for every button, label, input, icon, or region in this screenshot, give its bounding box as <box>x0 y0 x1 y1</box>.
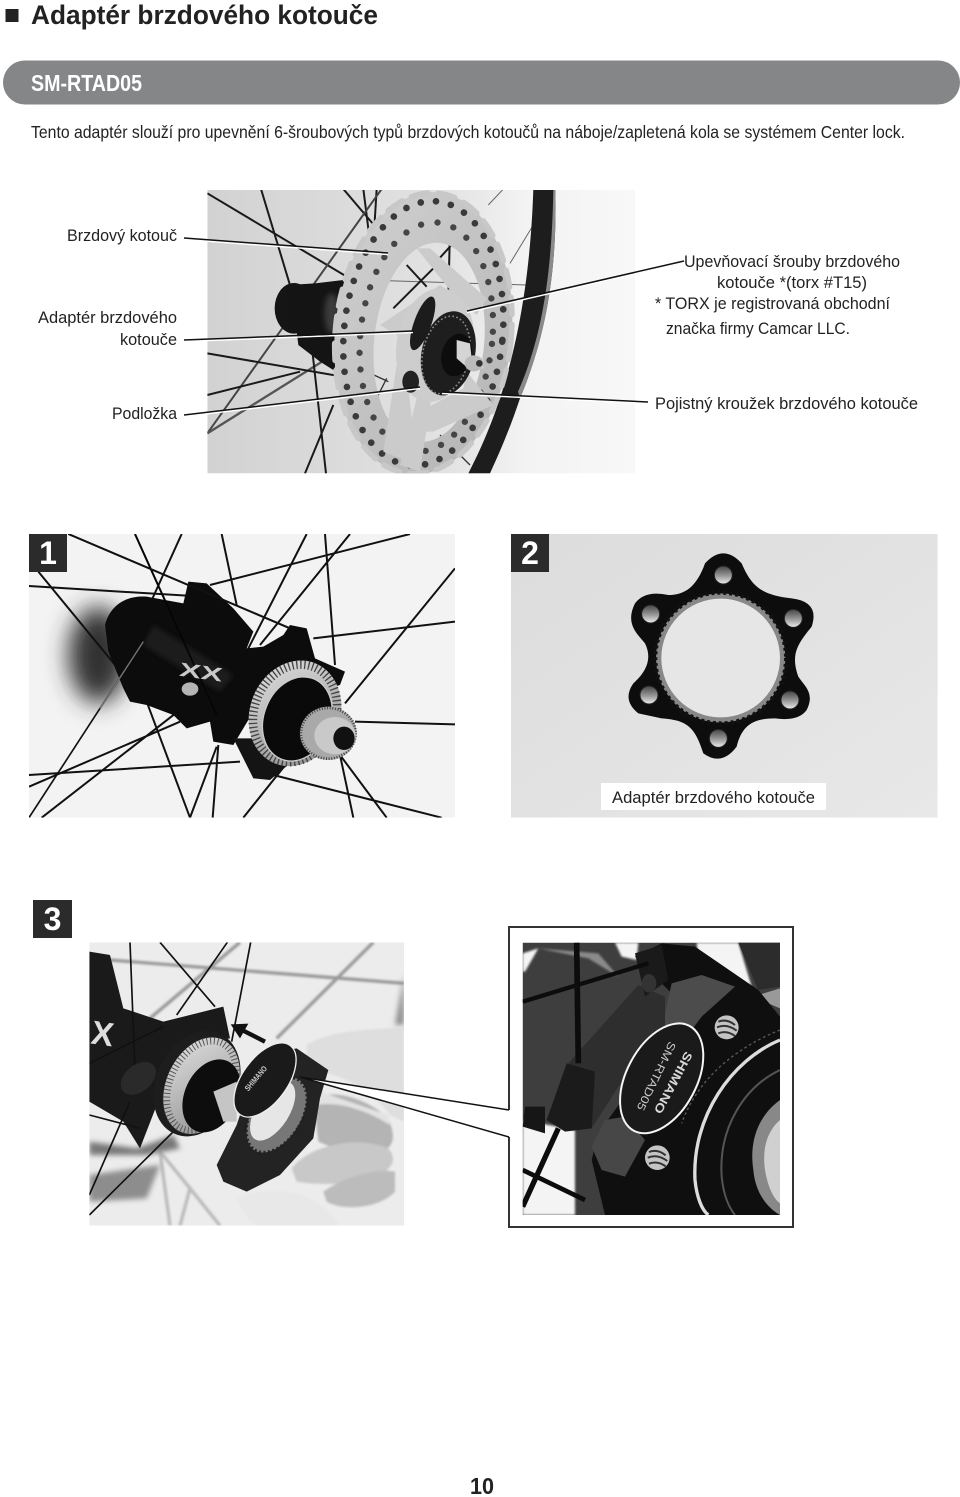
caption: disc adapter <box>601 783 826 810</box>
direction arrow <box>231 1024 265 1042</box>
caption: disc adapter: Adaptér brzdového kotouče <box>612 788 815 807</box>
model bar: SM-RTAD05: SM-RTAD05 <box>31 70 142 96</box>
label: lock ring: Pojistný kroužek brzdového kotouče <box>655 394 918 413</box>
label: disc adapter: Adaptér brzdového <box>38 308 177 327</box>
label: fixing bolts and TORX note: značka firmy Camcar LLC. <box>666 319 850 338</box>
adapter and lock ring <box>420 311 484 396</box>
step 3 photo: fitting the adapter: X <box>89 1015 116 1054</box>
highlighted adapter marking: SHIMANO <box>651 1049 695 1116</box>
step badge 1 <box>29 534 67 572</box>
quick release axle <box>300 707 357 760</box>
label: washer: Podložka <box>112 404 178 423</box>
step badge 3: 3 <box>44 901 61 937</box>
splined lock ring <box>248 660 342 766</box>
step 3 photo: fitting the adapter <box>89 942 404 1226</box>
label: fixing bolts and TORX note: kotouče *(torx #T15) <box>717 273 867 292</box>
step 1 photo: hub <box>29 534 455 818</box>
leader line: brake disc <box>184 238 388 254</box>
arm with spokes <box>592 943 780 1215</box>
hand <box>292 1028 404 1208</box>
hub <box>89 952 230 1148</box>
step badge 2 <box>511 534 549 572</box>
label: disc adapter: kotouče <box>120 330 177 349</box>
adapter in hand <box>217 1048 328 1192</box>
step badge 2: 2 <box>521 535 539 571</box>
rim <box>468 189 556 473</box>
center lock ring <box>682 1030 780 1215</box>
hero photo: wheel with brake disc <box>207 190 612 474</box>
leader line: disc adapter <box>184 331 413 342</box>
step badge 3 <box>33 900 72 938</box>
leader line: fixing bolts <box>467 261 684 312</box>
adapter part <box>629 553 814 759</box>
leader line: washer <box>184 387 420 416</box>
step 2 photo: disc adapter <box>511 534 938 818</box>
splined ring <box>155 1037 241 1136</box>
highlighted adapter marking: SM-RTAD05 <box>634 1039 677 1112</box>
brake disc <box>332 190 515 474</box>
step 3 detail photo: adapter close-up <box>523 943 780 1215</box>
label: fixing bolts and TORX note: Upevňovací šrouby brzdového <box>684 252 900 271</box>
hub logo: XX <box>178 660 224 687</box>
model bar: SM-RTAD05 <box>3 60 960 104</box>
adapter label: SHIMANO <box>243 1064 269 1093</box>
label: fixing bolts and TORX note <box>655 252 900 338</box>
cassette and hub <box>274 280 344 370</box>
leader line: lock ring <box>442 392 648 404</box>
label: fixing bolts and TORX note: * TORX je registrovaná obchodní <box>655 294 890 313</box>
threaded holes <box>645 1015 739 1170</box>
highlighted adapter marking <box>619 1022 704 1134</box>
hub body <box>105 582 345 745</box>
label: brake disc: Brzdový kotouč <box>67 226 177 245</box>
label: disc adapter <box>38 308 177 349</box>
section heading: Adaptér brzdového kotouče <box>31 0 378 30</box>
callout: frame and wedge linking the adapter to the detail photo <box>300 927 793 1227</box>
step badge 1: 1 <box>39 535 57 571</box>
